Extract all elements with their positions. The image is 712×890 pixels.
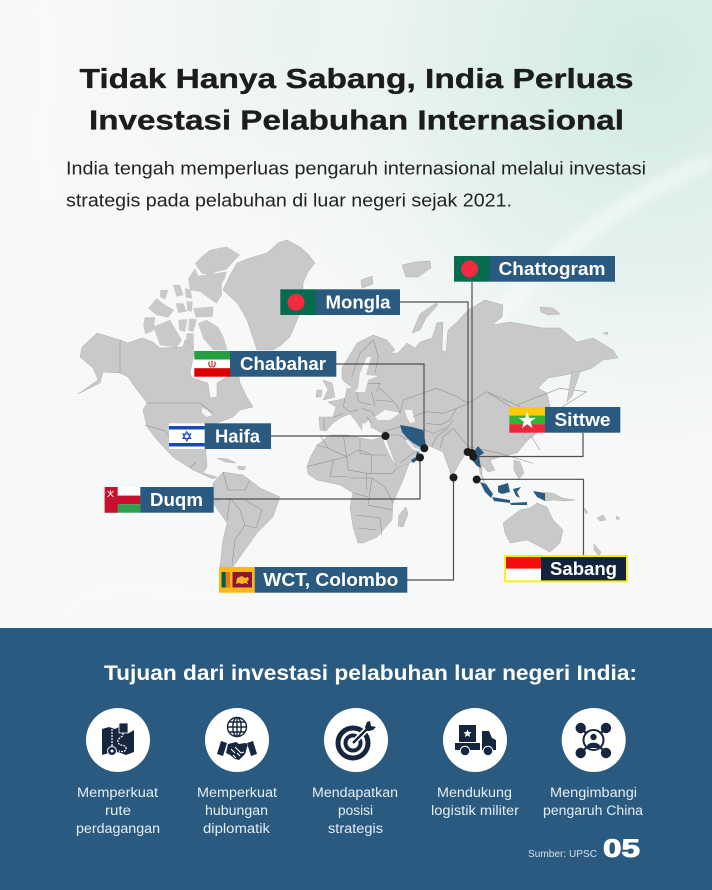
background bbox=[0, 0, 712, 630]
label: Chattogram bbox=[454, 256, 615, 282]
goal: strategic position bbox=[312, 708, 398, 836]
intro text: India tengah memperluas pengaruh internasional melalui investasi bbox=[66, 158, 646, 178]
panel heading: Tujuan dari investasi pelabuhan luar negeri India: bbox=[104, 662, 637, 685]
caption bbox=[197, 785, 277, 836]
port location dots bbox=[382, 432, 481, 484]
label: Chabahar: Chabahar bbox=[240, 354, 326, 374]
label: Sittwe bbox=[509, 407, 620, 433]
greenland bbox=[223, 240, 315, 350]
great lakes bbox=[202, 408, 212, 417]
north america borders bbox=[120, 340, 213, 468]
label: Sittwe: Sittwe bbox=[554, 410, 610, 430]
myanmar highlighted bbox=[472, 446, 484, 468]
sakhalin and japan bbox=[522, 371, 580, 440]
label: Sabang: Sabang bbox=[550, 559, 617, 579]
caption: rute bbox=[105, 803, 131, 818]
label: Duqm: Duqm bbox=[150, 490, 203, 510]
indonesia highlighted bbox=[480, 482, 545, 505]
persian gulf bbox=[406, 440, 419, 450]
australia bbox=[503, 503, 563, 552]
oman highlighted bbox=[411, 451, 422, 463]
new zealand bbox=[594, 544, 601, 556]
north america bbox=[78, 333, 253, 479]
pacific specks bbox=[584, 508, 620, 521]
canadian arctic islands bbox=[143, 247, 240, 350]
inland seas bbox=[343, 357, 415, 428]
russian arctic islands bbox=[361, 261, 608, 335]
eurasia bbox=[319, 300, 618, 485]
southern africa borders bbox=[350, 478, 393, 535]
caption: logistik militer bbox=[431, 803, 520, 818]
papua new guinea bbox=[545, 492, 575, 501]
page number: 05 bbox=[603, 835, 640, 863]
goal: diplomatic relations bbox=[197, 708, 277, 836]
connector lines bbox=[213, 282, 584, 580]
label: WCT, Colombo bbox=[219, 567, 407, 593]
great britain and ireland bbox=[316, 380, 335, 400]
label: WCT, Colombo: WCT, Colombo bbox=[263, 570, 398, 590]
caption: Mendukung bbox=[437, 785, 512, 800]
title bbox=[80, 63, 634, 136]
caption: Memperkuat bbox=[197, 785, 277, 800]
label: Sabang bbox=[504, 555, 628, 582]
label: Chabahar bbox=[194, 351, 336, 377]
africa bbox=[307, 435, 410, 543]
label: Haifa bbox=[169, 423, 271, 449]
caption: Mendapatkan bbox=[312, 785, 398, 800]
title: Tidak Hanya Sabang, India Perluas bbox=[80, 63, 634, 94]
caption: hubungan bbox=[205, 803, 268, 818]
caption bbox=[76, 785, 160, 836]
label: Haifa: Haifa bbox=[215, 426, 261, 446]
caption: perdagangan bbox=[76, 821, 160, 836]
madagascar bbox=[398, 507, 408, 527]
iran highlighted bbox=[400, 425, 426, 447]
caption: Mengimbangi bbox=[550, 785, 637, 800]
intro text bbox=[66, 158, 646, 211]
caption: pengaruh China bbox=[543, 803, 644, 818]
caption: strategis bbox=[328, 821, 383, 836]
goal: military logistics bbox=[431, 708, 520, 818]
label: Mongla: Mongla bbox=[326, 292, 392, 312]
bottom panel bbox=[0, 628, 712, 890]
caption bbox=[431, 785, 520, 818]
caption: posisi bbox=[338, 803, 373, 818]
south america borders bbox=[215, 472, 262, 565]
caribbean islands bbox=[217, 458, 246, 470]
goal: balancing china bbox=[543, 708, 644, 818]
goal: trade routes bbox=[76, 708, 160, 836]
philippines taiwan bbox=[514, 460, 524, 479]
title: Investasi Pelabuhan Internasional bbox=[89, 104, 624, 136]
caption: Memperkuat bbox=[77, 785, 158, 800]
intro text: strategis pada pelabuhan di luar negeri sejak 2021. bbox=[66, 191, 512, 211]
caption bbox=[543, 785, 644, 818]
source: Sumber: UPSC bbox=[528, 848, 597, 860]
label: Chattogram: Chattogram bbox=[498, 259, 606, 279]
caption bbox=[312, 785, 398, 836]
south america bbox=[213, 472, 280, 567]
label: Mongla bbox=[280, 289, 400, 315]
label: Duqm bbox=[105, 487, 214, 513]
caption: diplomatik bbox=[203, 821, 270, 836]
eurasia and africa borders bbox=[307, 340, 587, 490]
world map bbox=[78, 240, 620, 567]
